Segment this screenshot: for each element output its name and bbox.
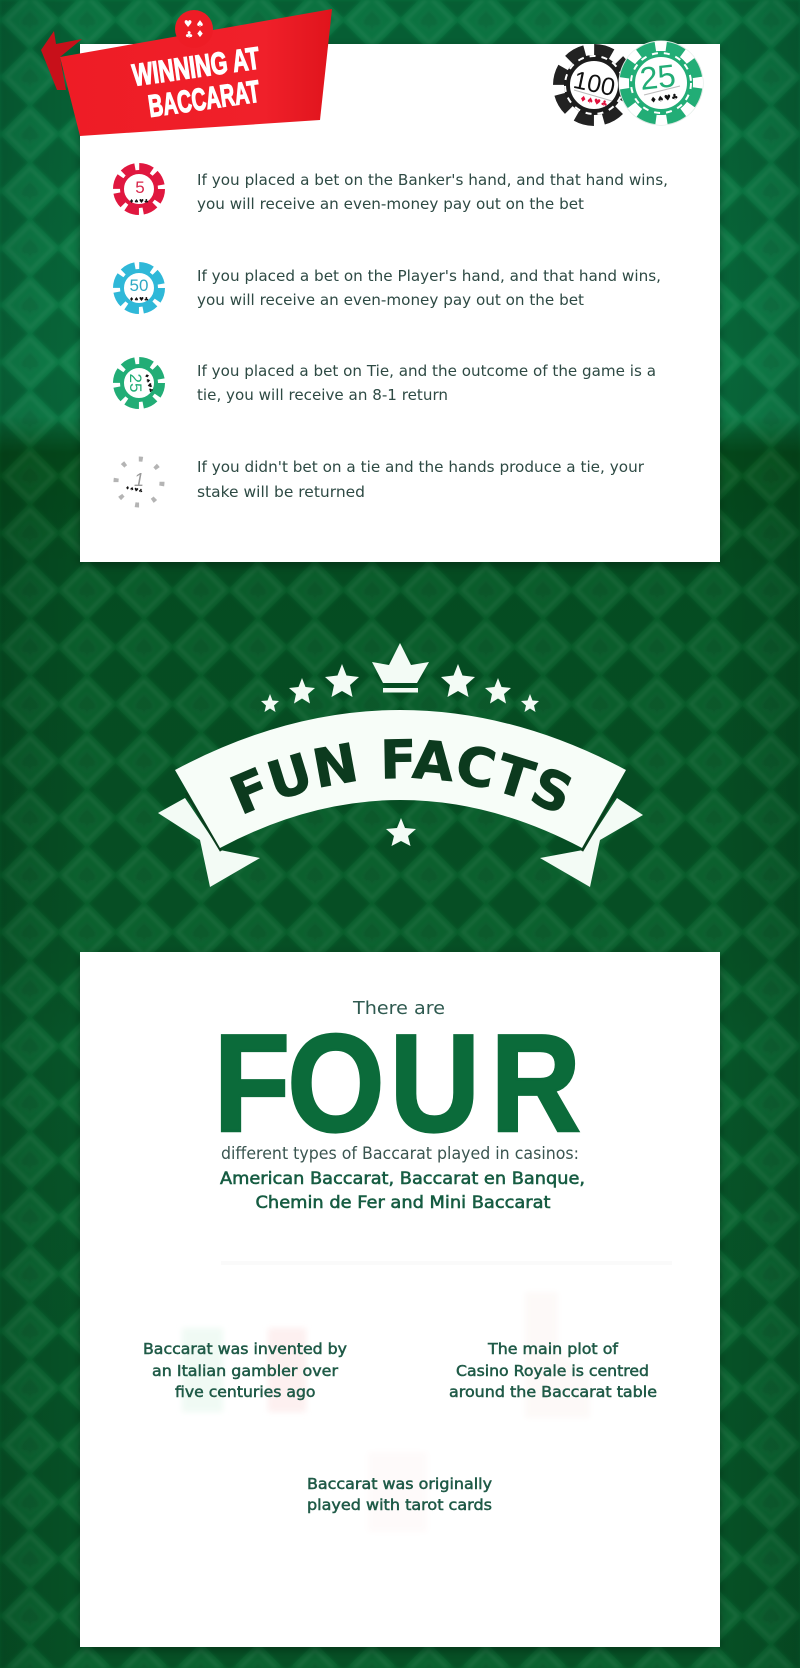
chip: red 5: ♦♠♥♣: [129, 199, 149, 205]
fact: invented: five centuries ago: [175, 1383, 316, 1401]
chip: red 5: [118, 168, 160, 210]
fact: casino royale: Casino Royale is centred: [456, 1362, 649, 1380]
fact: tarot cards: Baccarat was originally: [307, 1475, 492, 1493]
faint bottle ghost: [525, 1292, 590, 1418]
fact: tarot cards: [307, 1475, 492, 1514]
chip: green 25 rotated: [118, 362, 160, 404]
baccarat types: American Baccarat, Baccarat en Banque,: [220, 1169, 585, 1188]
ribbon band: [175, 710, 626, 848]
text: no tie bet: If you didn't bet on a tie and the hands produce a tie, your: [197, 458, 645, 476]
chip: black 100: ♦♠♥♣: [579, 94, 609, 109]
subheading: different types of Baccarat played in casinos:: [221, 1144, 579, 1163]
chip: faint white 1: ♦♠♥♣: [125, 485, 143, 495]
fact: casino royale: around the Baccarat table: [449, 1383, 657, 1401]
text: banker bet: [197, 171, 668, 213]
ribbon tails: [158, 798, 643, 887]
red ribbon heading: [41, 9, 332, 136]
chip: green 25: 25: [638, 57, 677, 97]
title: BACCARAT: [146, 74, 262, 124]
ribbon fold shadows: [186, 793, 616, 851]
chip: blue 50: ♦♠♥♣: [129, 297, 149, 303]
there are text: There are: [352, 998, 445, 1019]
chip: black 100: [561, 52, 627, 118]
fact: casino royale: [449, 1340, 657, 1401]
text: banker bet: you will receive an even-money pay out on the bet: [197, 195, 584, 213]
chip: faint white 1: 1: [134, 470, 144, 490]
ribbon tab with suits: ♣: [185, 30, 193, 41]
banner title: FUN FACTS: [230, 738, 572, 814]
chip: green 25 rotated: 25: [126, 374, 145, 392]
baccarat types: Chemin de Fer and Mini Baccarat: [256, 1193, 551, 1212]
text: player bet: If you placed a bet on the Player's hand, and that hand wins,: [197, 267, 661, 285]
chip: green 25: ♦♠♥♣: [649, 92, 679, 105]
ribbon tab with suits: ♠: [196, 19, 204, 30]
ribbon tab with suits: [175, 10, 213, 48]
text: no tie bet: stake will be returned: [197, 483, 365, 501]
crown: [372, 643, 429, 692]
fact: tarot cards: played with tarot cards: [307, 1496, 492, 1514]
text: tie bet: tie, you will receive an 8-1 return: [197, 386, 448, 404]
chip: black 100: 100: [571, 66, 618, 102]
chip: faint white 1: [116, 459, 162, 505]
four headline: FOUR: [214, 1006, 581, 1161]
title: [130, 40, 262, 124]
text: player bet: [197, 267, 661, 309]
panel: fun facts: [80, 952, 720, 1647]
text: tie bet: [197, 362, 656, 404]
chip: blue 50: 50: [130, 276, 148, 295]
text: tie bet: If you placed a bet on Tie, and the outcome of the game is a: [197, 362, 656, 380]
title: WINNING AT: [130, 40, 262, 93]
stars: [261, 664, 539, 846]
fact: invented: an Italian gambler over: [152, 1362, 339, 1380]
chip: blue 50: [118, 267, 160, 309]
panel: winning at baccarat: [80, 41, 720, 562]
faint card ghosts: [182, 1328, 306, 1412]
text: player bet: you will receive an even-money pay out on the bet: [197, 291, 584, 309]
text: no tie bet: [197, 458, 645, 501]
ribbon tab with suits: ♥: [184, 19, 192, 30]
fact: casino royale: The main plot of: [487, 1340, 619, 1358]
text: banker bet: If you placed a bet on the Banker's hand, and that hand wins,: [197, 171, 668, 189]
ribbon tab with suits: ♦: [196, 29, 204, 40]
baccarat types: [220, 1169, 585, 1212]
ribbon body: [60, 9, 332, 136]
chip: green 25 rotated: ♦♠♥♣: [143, 373, 154, 394]
chip: green 25: [619, 41, 703, 125]
fact: invented: [143, 1340, 347, 1401]
chip: red 5: 5: [135, 178, 145, 197]
ribbon fold: [41, 31, 82, 90]
fact: invented: Baccarat was invented by: [143, 1340, 347, 1358]
faint tarot ghost: [368, 1452, 427, 1532]
fun facts badge: [158, 643, 643, 887]
